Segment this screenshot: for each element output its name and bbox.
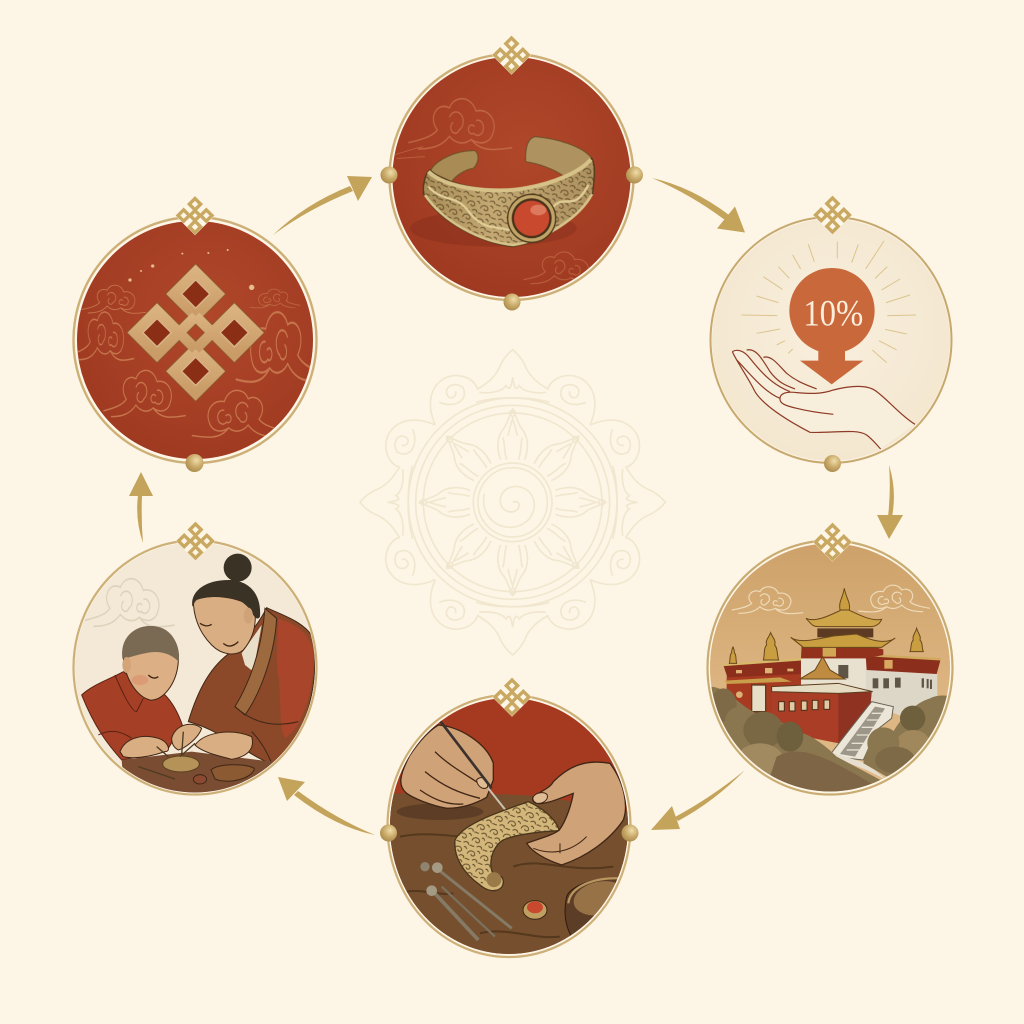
cloud motifs	[393, 99, 602, 284]
panel: monastery	[700, 522, 954, 807]
ornament: endless knot	[175, 196, 215, 235]
arrow: bracelet to ten percent	[652, 178, 745, 232]
bead	[186, 454, 204, 472]
coral stone	[508, 194, 556, 242]
ring	[74, 540, 316, 794]
panel: bracelet	[380, 35, 643, 310]
cloud motifs	[73, 285, 322, 437]
label: 10%	[803, 292, 863, 333]
right hand	[527, 762, 625, 865]
coral bead	[523, 901, 547, 919]
ring	[390, 54, 634, 300]
young monk	[82, 626, 182, 760]
panel: craftsman engraving	[380, 677, 638, 963]
illustration: endless knot on red with clouds	[73, 216, 322, 464]
arrow: craftsman to apprentice	[278, 777, 375, 835]
central dharma wheel watermark	[360, 350, 665, 655]
stone stairs	[832, 702, 893, 780]
illustration: coral and brass cuff	[388, 53, 634, 301]
beads	[380, 824, 638, 842]
orange drop arrow	[789, 268, 875, 384]
beads	[380, 166, 643, 310]
sun rays	[742, 241, 916, 363]
left hand with tool	[397, 721, 513, 820]
bowl	[564, 877, 618, 936]
endless knot	[135, 272, 256, 393]
stars	[128, 249, 254, 290]
ornament: endless knot	[813, 195, 852, 235]
ornament: endless knot	[176, 521, 215, 561]
arrow: monastery to craftsman	[651, 770, 745, 830]
table	[122, 752, 274, 792]
hills and shrubs	[712, 686, 947, 792]
bead	[824, 455, 841, 472]
background cloud	[85, 579, 175, 627]
ring	[710, 217, 952, 463]
panel: teacher and apprentice	[72, 521, 318, 802]
ornament: endless knot	[492, 35, 531, 75]
engraved metal strip	[455, 802, 559, 891]
temple buildings	[723, 588, 941, 743]
arrow: ten percent to monastery	[877, 465, 903, 539]
ornament: endless knot	[492, 677, 532, 717]
ornament: endless knot	[813, 522, 852, 562]
sky clouds	[732, 585, 930, 614]
illustration: hand receiving ten percent	[709, 216, 953, 464]
ring	[74, 217, 316, 463]
panel: endless knot	[73, 196, 322, 472]
arrow: apprentice to knot	[129, 472, 153, 543]
illustration: teacher guiding young monk	[72, 540, 318, 802]
illustration: hilltop monastery	[710, 544, 950, 792]
workbench	[390, 793, 628, 954]
hand	[732, 350, 915, 449]
teacher	[188, 554, 315, 763]
ring	[708, 540, 952, 794]
ring	[388, 695, 630, 957]
arrow: knot to bracelet	[273, 176, 372, 235]
panel: ten percent offering	[709, 195, 953, 472]
illustration: hands engraving a cuff	[390, 699, 628, 954]
hands and workpiece	[120, 724, 254, 784]
engraving tools	[420, 862, 512, 940]
